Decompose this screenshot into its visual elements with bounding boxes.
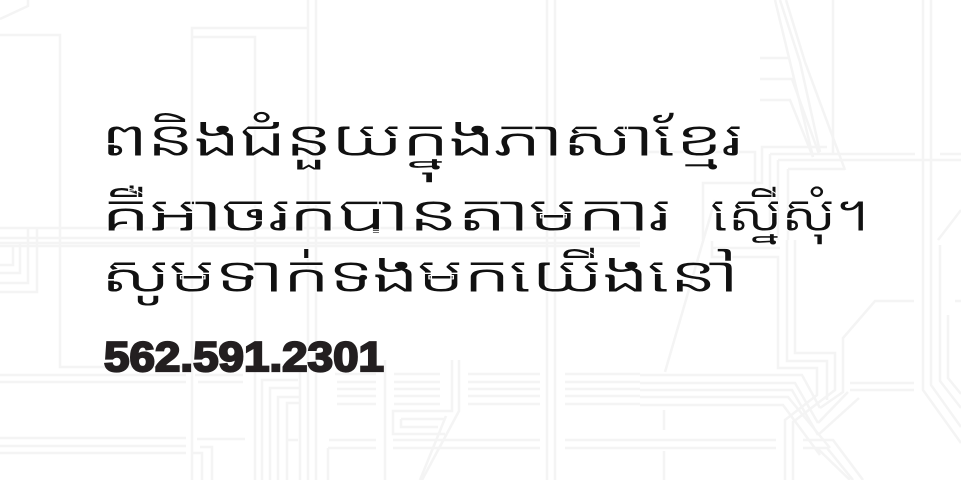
title line 1: ពនិងជំនួយក្នុងភាសាខ្មែរ xyxy=(100,101,740,184)
title line 2: ស្នើសុំ។ xyxy=(710,176,867,246)
title line 2: គឺអាចរកបានតាមការ xyxy=(100,176,668,246)
title line 3: សូមទាក់ទងមកយើងនៅ xyxy=(100,237,737,307)
phone number: 562.591.2301 xyxy=(104,333,384,380)
title line 2 xyxy=(100,176,867,246)
